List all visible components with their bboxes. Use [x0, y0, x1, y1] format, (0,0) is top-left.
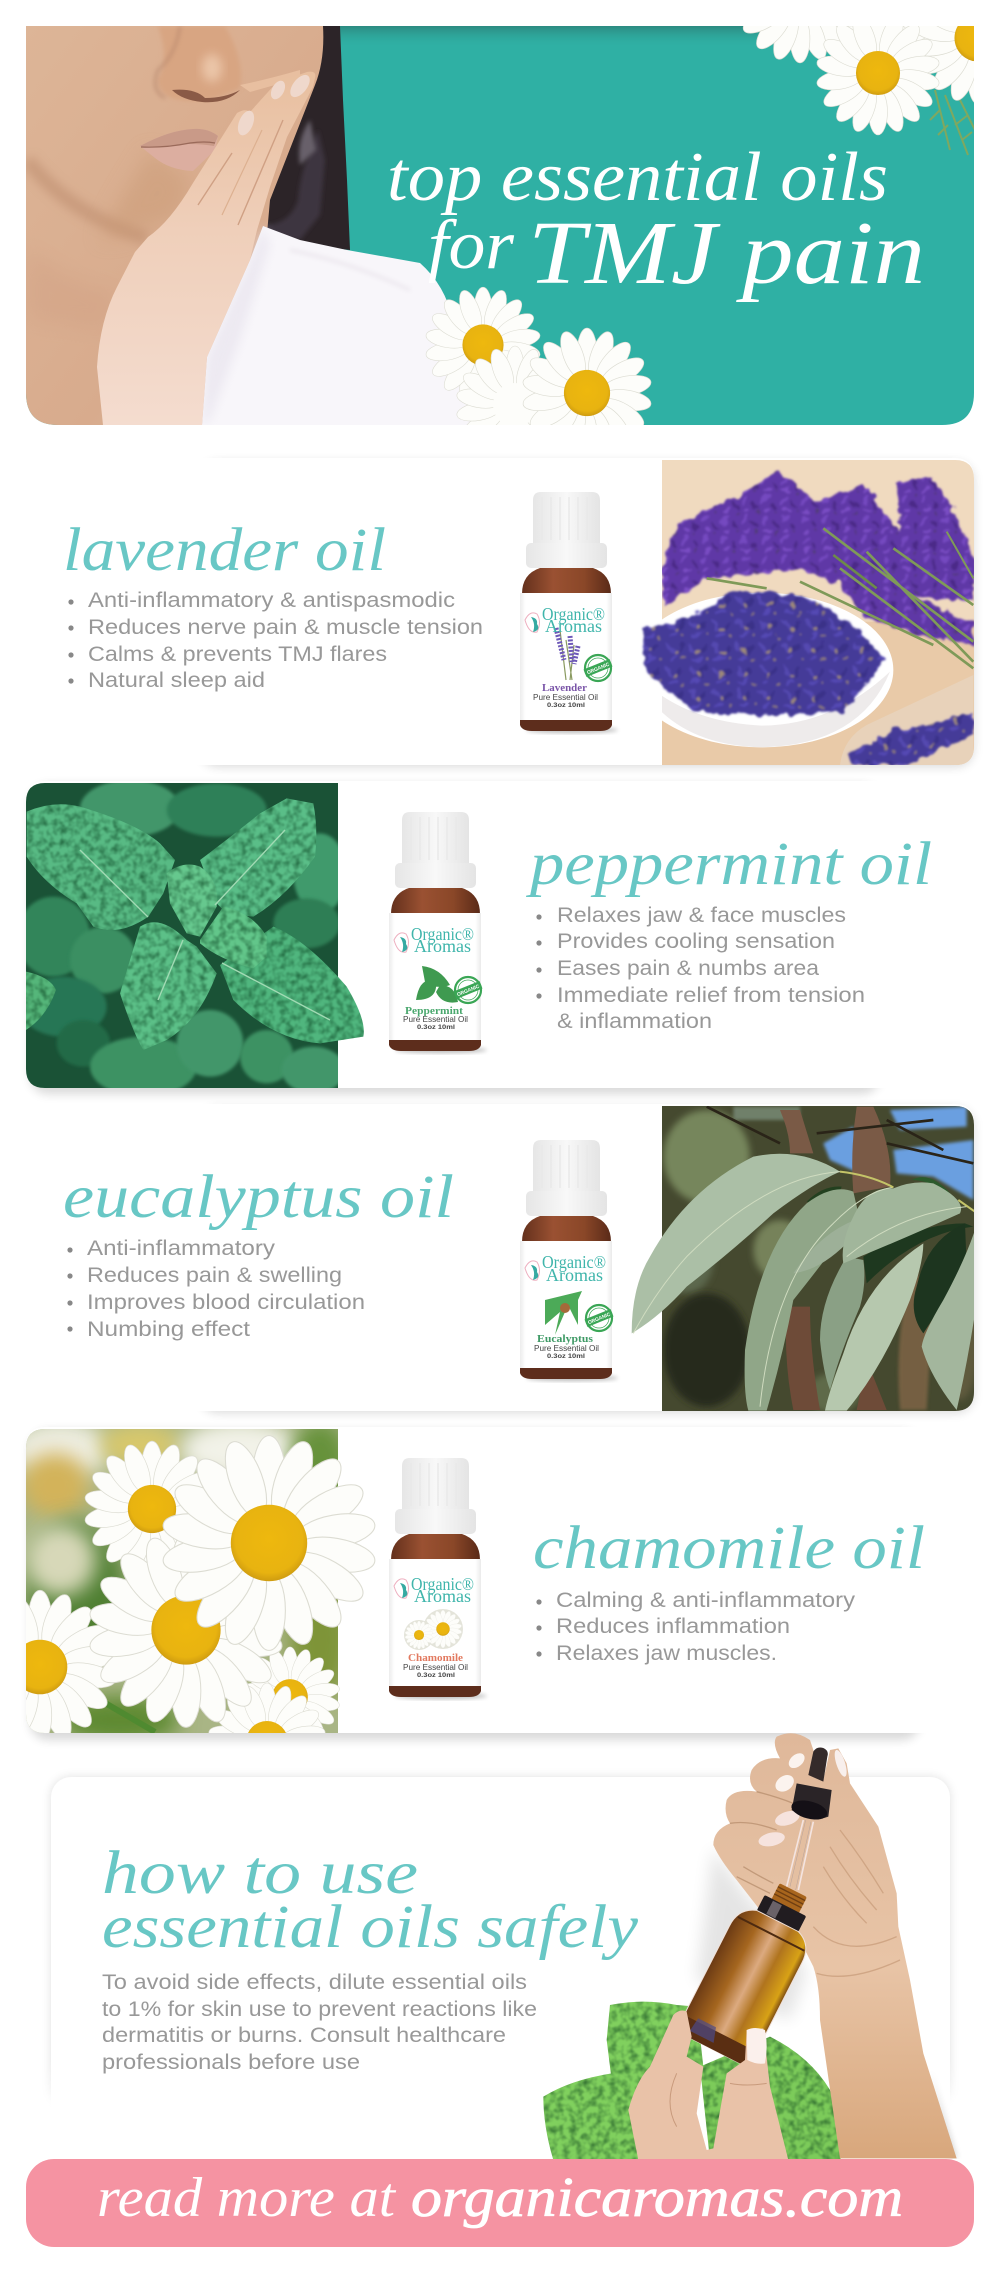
- icon: peppermint bottle: Peppermint: [405, 1005, 463, 1017]
- icon: chamomile bottle: Organic®: [411, 1574, 474, 1594]
- icon: peppermint bottle: Pure Essential Oil: [403, 1014, 468, 1024]
- heading: chamomile oil: [533, 1515, 925, 1582]
- illustration: hand: [97, 72, 315, 425]
- bullet list: Numbing effect: [87, 1318, 250, 1341]
- bullet list: Immediate relief from tension: [557, 984, 865, 1007]
- photo: lavender: [662, 460, 974, 765]
- title: top essential oils: [387, 139, 888, 216]
- bullet list: Calms & prevents TMJ flares: [88, 643, 387, 666]
- icon: lavender bottle: Lavender: [542, 682, 587, 694]
- banner text: [97, 2167, 903, 2229]
- heading: how to use: [102, 1840, 418, 1907]
- icon: lavender bottle: 0.3oz 10ml: [547, 702, 585, 709]
- panel: eucalyptus oil: [26, 1104, 980, 1413]
- icon: chamomile bottle: [389, 1458, 487, 1699]
- bullet list: Relaxes jaw muscles.: [556, 1642, 777, 1665]
- panel: lavender oil: [26, 458, 979, 768]
- bullet list: Reduces inflammation: [556, 1615, 790, 1638]
- illustration: dropper: [808, 1747, 828, 1782]
- icon: lavender bottle: Organic®: [542, 604, 605, 624]
- icon: eucalyptus bottle: Organic®: [542, 1252, 606, 1272]
- icon: eucalyptus bottle: 0.3oz 10ml: [547, 1353, 585, 1360]
- hero panel: [26, 26, 974, 425]
- illustration: upper hand: [713, 1733, 957, 2158]
- bullet list: Improves blood circulation: [87, 1291, 365, 1314]
- icon: peppermint bottle: ORGANIC: [456, 984, 481, 998]
- icon: top right daisies: [742, 26, 974, 136]
- bullet list: & inflammation: [557, 1010, 712, 1033]
- text block: [102, 1971, 537, 2074]
- heading: peppermint oil: [526, 831, 932, 898]
- icon: eucalyptus bottle: [520, 1140, 618, 1381]
- panel: peppermint oil: [17, 780, 974, 1097]
- icon: eucalyptus bottle: ORGANIC: [587, 1312, 612, 1326]
- title: for: [428, 207, 515, 284]
- icon: eucalyptus bottle: Eucalyptus: [537, 1333, 594, 1345]
- illustration: mint leaves: [543, 2002, 841, 2160]
- icon: lavender bottle: ORGANIC: [586, 662, 611, 676]
- icon: peppermint bottle: [389, 812, 487, 1053]
- bullet list: Calming & anti-inflammatory: [556, 1589, 856, 1612]
- icon: peppermint bottle: Aromas: [414, 936, 471, 956]
- heading: eucalyptus oil: [63, 1164, 454, 1231]
- photo: eucalyptus: [632, 1105, 980, 1413]
- panel: chamomile oil: [26, 1429, 924, 1744]
- bullet list: Natural sleep aid: [88, 669, 265, 692]
- illustration: lips: [140, 138, 218, 171]
- bullet list: Provides cooling sensation: [557, 930, 835, 953]
- photo: mint leaves: [17, 780, 364, 1097]
- icon: eucalyptus bottle: Pure Essential Oil: [534, 1343, 599, 1353]
- illustration: bottle: [686, 1884, 806, 2064]
- icon: lavender bottle: [520, 492, 618, 733]
- icon: chamomile bottle: Aromas: [414, 1586, 471, 1606]
- banner text: organicaromas.com: [411, 2167, 903, 2229]
- icon: bottom daisies: [426, 286, 652, 425]
- bullet list: Eases pain & numbs area: [557, 957, 819, 980]
- illustration: woman holding jaw: [26, 26, 493, 425]
- icon: lavender bottle: Pure Essential Oil: [533, 692, 598, 702]
- illustration: shirt: [202, 226, 493, 425]
- title: TMJ pain: [528, 204, 925, 303]
- illustration: bowl: [662, 592, 894, 748]
- icon: chamomile bottle: 0.3oz 10ml: [417, 1672, 455, 1679]
- text block: dermatitis or burns. Consult healthcare: [102, 2024, 506, 2047]
- heading: lavender oil: [63, 517, 386, 584]
- banner: read more: [26, 2159, 974, 2247]
- bullet list: [68, 589, 483, 692]
- bullet list: [536, 1589, 856, 1665]
- bullet list: Anti-inflammatory: [87, 1237, 276, 1260]
- heading: [102, 1840, 639, 1961]
- bullet list: [536, 904, 865, 1033]
- icon: chamomile bottle: Chamomile: [408, 1652, 463, 1664]
- bullet list: Reduces nerve pain & muscle tension: [88, 616, 483, 639]
- icon: ferns: [930, 90, 975, 155]
- bullet list: Reduces pain & swelling: [87, 1264, 342, 1287]
- icon: peppermint bottle: 0.3oz 10ml: [417, 1024, 455, 1031]
- icon: peppermint bottle: Organic®: [411, 924, 474, 944]
- icon: lavender bottle: Aromas: [545, 616, 602, 636]
- photo: chamomile flowers: [26, 1429, 376, 1733]
- heading: essential oils safely: [102, 1894, 639, 1961]
- title: [387, 139, 925, 303]
- icon: chamomile bottle: Pure Essential Oil: [403, 1662, 468, 1672]
- illustration: scoop: [840, 675, 973, 765]
- text block: professionals before use: [102, 2051, 360, 2074]
- bullet list: [67, 1237, 365, 1341]
- text block: to 1% for skin use to prevent reactions like: [102, 1998, 537, 2021]
- banner text: read more at: [97, 2167, 397, 2229]
- bullet list: Relaxes jaw & face muscles: [557, 904, 846, 927]
- illustration: lower hand: [628, 2011, 788, 2160]
- panel: how to use safely: [36, 1733, 966, 2160]
- icon: eucalyptus bottle: Aromas: [546, 1265, 603, 1285]
- text block: To avoid side effects, dilute essential oils: [102, 1971, 527, 1994]
- bullet list: Anti-inflammatory & antispasmodic: [88, 589, 455, 612]
- illustration: hands with dropper bottle: [543, 1733, 957, 2160]
